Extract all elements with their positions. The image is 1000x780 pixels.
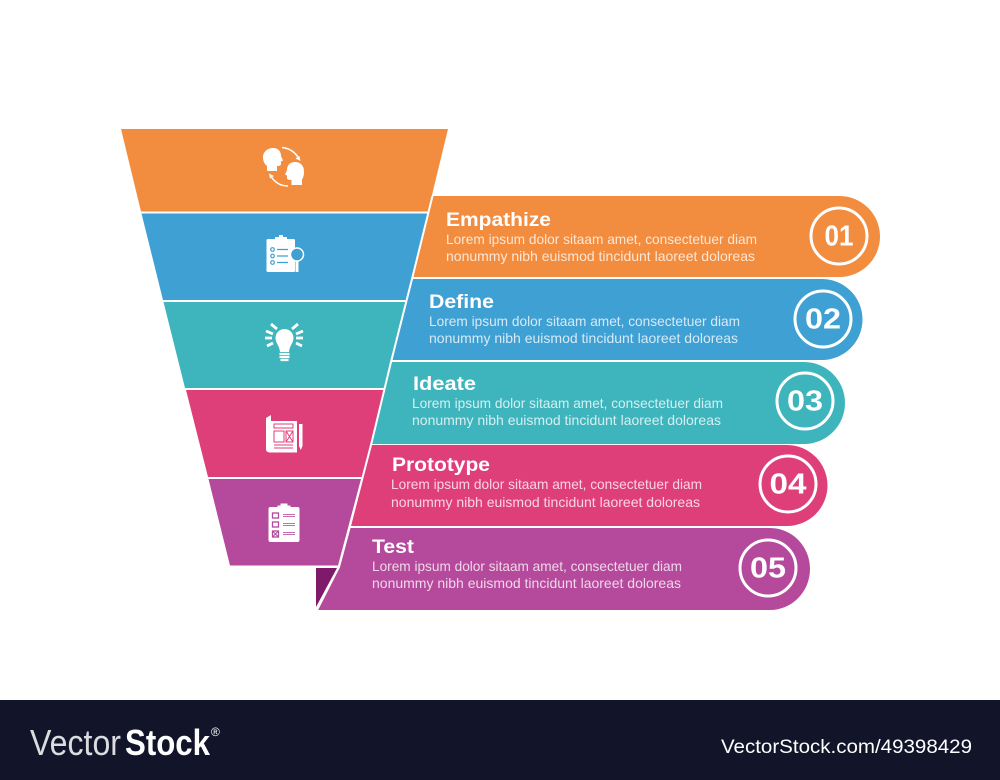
ribbon 05: test: nonummy nibh euismod tincidunt laoreet doloreas xyxy=(372,575,681,591)
number badge xyxy=(760,456,816,512)
fold shadow xyxy=(316,568,337,607)
number badge xyxy=(740,540,796,596)
description: Lorem ipsum dolor sitaam amet, consectetuer diam xyxy=(429,313,740,329)
footer bar xyxy=(0,700,1000,780)
registered mark: ® xyxy=(211,725,220,739)
funnel band: test xyxy=(208,479,361,566)
ribbon 03: ideate xyxy=(372,362,845,444)
heading: Ideate xyxy=(413,374,476,395)
funnel band: empathize xyxy=(121,129,448,212)
description: Lorem ipsum dolor sitaam amet, consectetuer diam xyxy=(391,476,702,492)
icon: clipboard with magnifier xyxy=(266,235,304,272)
heading: Test xyxy=(372,537,415,558)
number badge xyxy=(811,208,867,264)
number badge: 02 xyxy=(805,304,841,336)
white separator between funnel and ribbons xyxy=(316,196,432,611)
heading: Define xyxy=(429,292,494,313)
ribbon 01: empathize: nonummy nibh euismod tincidunt laoreet doloreas xyxy=(446,248,755,264)
icon: light bulb xyxy=(265,324,303,360)
heading: Prototype xyxy=(392,455,490,476)
ribbon 02: define: nonummy nibh euismod tincidunt laoreet doloreas xyxy=(429,330,738,346)
logo: Vector: Vector xyxy=(30,722,121,763)
ribbon 05: test xyxy=(317,528,810,610)
description: Lorem ipsum dolor sitaam amet, consectetuer diam xyxy=(446,231,757,247)
funnel band: define xyxy=(142,214,428,300)
funnel xyxy=(121,129,448,566)
ribbon 03: ideate: nonummy nibh euismod tincidunt laoreet doloreas xyxy=(412,412,721,428)
number badge: 05 xyxy=(750,552,786,584)
number badge xyxy=(777,373,833,429)
funnel band: prototype xyxy=(186,390,384,477)
icon: checklist clipboard xyxy=(268,504,300,542)
description: Lorem ipsum dolor sitaam amet, consectetuer diam xyxy=(372,558,682,574)
icon: two heads exchanging ideas xyxy=(263,148,304,186)
funnel band: ideate xyxy=(164,302,406,388)
number badge: 01 xyxy=(824,220,854,252)
heading: Empathize xyxy=(446,210,551,231)
ribbon 04: prototype: nonummy nibh euismod tincidunt laoreet doloreas xyxy=(391,494,700,510)
ribbon 04: prototype xyxy=(350,445,828,526)
number badge: 03 xyxy=(787,386,823,418)
number badge xyxy=(795,291,851,347)
ribbon 01: empathize xyxy=(413,196,880,277)
ribbon 02: define xyxy=(392,279,863,360)
description: Lorem ipsum dolor sitaam amet, consectetuer diam xyxy=(412,395,723,411)
icon: blueprint and pencil xyxy=(266,415,302,452)
logo: Stock: Stock xyxy=(125,722,211,763)
image id: VectorStock.com/49398429 xyxy=(721,737,972,758)
number badge: 04 xyxy=(770,468,806,500)
